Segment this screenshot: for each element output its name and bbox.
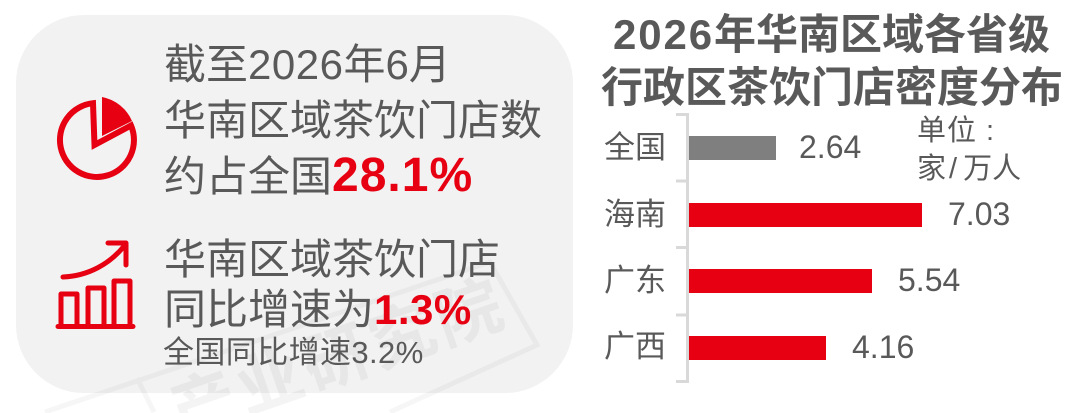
chart axis <box>676 113 689 383</box>
bar: 全国 <box>689 136 776 160</box>
bar: 广东 <box>689 269 872 293</box>
label: 全国: 全国 <box>604 130 666 165</box>
title: 2026年华南区域各省级 <box>613 11 1050 58</box>
unit note <box>917 115 1021 185</box>
label: 广东: 广东 <box>604 263 666 298</box>
icon: growth bars and arrow <box>56 240 136 329</box>
unit note: 家/万人 <box>917 153 1021 185</box>
text: national growth: 全国同比增速3.2% <box>163 335 424 370</box>
label: 广西: 广西 <box>604 329 666 364</box>
value: 广西: 4.16 <box>852 329 914 365</box>
bar: 广西 <box>689 336 826 360</box>
watermark <box>44 260 540 413</box>
title <box>601 11 1063 111</box>
label: 海南: 海南 <box>604 197 666 232</box>
panel: summary background <box>16 15 573 393</box>
unit note: 单位 : <box>917 115 995 147</box>
value: 全国: 2.64 <box>799 129 861 165</box>
title: 行政区茶饮门店密度分布 <box>601 64 1063 111</box>
icon: pie chart <box>56 97 137 180</box>
value: 海南: 7.03 <box>948 196 1010 232</box>
bar: 海南 <box>689 203 922 227</box>
text: growth line 2 with value: 同比增速为1.3% <box>164 286 472 333</box>
text: share line 3 with value: 约占全国28.1% <box>164 149 473 202</box>
text: share line 2: 华南区域茶饮门店数 <box>164 97 542 144</box>
text block: growth line 1: 华南区域茶饮门店 <box>164 236 500 283</box>
text block: share of stores: 截至2026年6月 <box>164 41 451 88</box>
value: 广东: 5.54 <box>898 262 960 298</box>
